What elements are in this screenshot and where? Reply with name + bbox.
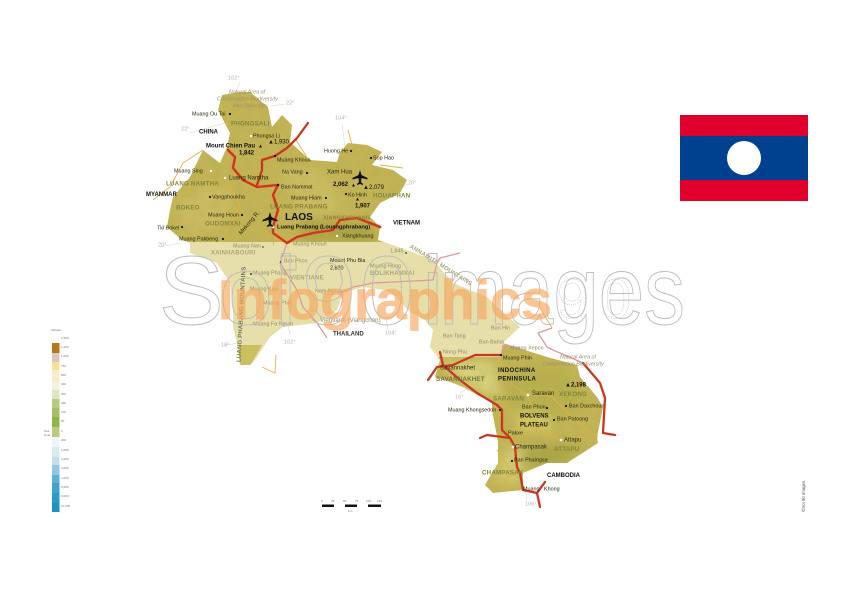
central faded labels: Nam Ngum bbox=[315, 288, 343, 294]
north labels: Vangphoukha bbox=[212, 194, 245, 200]
legend: altitude scale: 3,000 bbox=[61, 466, 69, 470]
central faded labels: 104° bbox=[385, 330, 397, 336]
south labels: Muang Xepon bbox=[510, 345, 544, 351]
south labels: Champasak bbox=[515, 445, 548, 451]
south labels: Savannakhet bbox=[440, 366, 475, 372]
south labels: CHAMPASAK bbox=[482, 470, 524, 477]
north labels: Phongsa Li bbox=[253, 133, 280, 139]
north labels: 1,907 bbox=[355, 204, 371, 210]
north labels: Xam Hua bbox=[327, 170, 353, 176]
scale bar: 25 bbox=[331, 499, 335, 503]
south labels: Nong Phu bbox=[443, 349, 467, 355]
legend: altitude scale: Altitude bbox=[51, 328, 61, 332]
south labels: XEKONG bbox=[559, 391, 587, 398]
legend: altitude scale: 1,500 bbox=[61, 336, 69, 340]
north labels: ▲2,079 bbox=[363, 185, 385, 191]
scale bar bbox=[321, 499, 382, 513]
south labels: Ban Phon bbox=[522, 404, 546, 410]
central faded labels: 2,820 bbox=[330, 265, 344, 271]
central faded labels: Muang Phang bbox=[253, 270, 287, 276]
legend: altitude scale: 2,000 bbox=[61, 457, 69, 461]
legend: altitude scale: 600 bbox=[61, 373, 66, 377]
north labels: 2,062 bbox=[333, 182, 349, 188]
north labels: 104° bbox=[335, 115, 347, 121]
south labels: Ban Patoong bbox=[557, 416, 588, 422]
legend: altitude scale: 1,200 bbox=[61, 345, 69, 349]
central faded labels: LUANG PHABANG MOUNTAINS bbox=[237, 267, 248, 362]
north labels: 20° bbox=[408, 180, 416, 186]
north labels: 102° bbox=[228, 75, 240, 81]
north labels: Mekong R. bbox=[238, 210, 262, 236]
legend: altitude scale: 0 bbox=[61, 429, 63, 433]
north labels: Muang Hiam bbox=[291, 195, 322, 201]
legend: altitude scale: 6,000 bbox=[61, 494, 69, 498]
north labels: MYANMAR bbox=[146, 192, 177, 198]
central faded labels: THAILAND bbox=[333, 332, 364, 338]
north labels: Natural Area of bbox=[229, 89, 266, 95]
south labels: BOLVENS bbox=[520, 414, 549, 420]
south labels: INDOCHINA bbox=[498, 368, 536, 374]
north labels: LUANG NAMTHA bbox=[166, 181, 219, 188]
watermark: dotted numerals: 90 bbox=[557, 267, 631, 330]
central faded labels: Muang Kasi bbox=[250, 286, 278, 292]
map: Laos terrain bbox=[167, 92, 603, 493]
north labels: Muang Khoua bbox=[277, 157, 311, 163]
south labels: Muang Khongsedon bbox=[448, 407, 496, 413]
south labels: Muang bbox=[523, 486, 539, 492]
terrain: faded central band bbox=[188, 242, 520, 365]
central faded labels: Vientiane (Viangchan) bbox=[320, 317, 381, 324]
central faded labels: ANNAMITE MOUNTAINS bbox=[408, 244, 473, 288]
watermark: orange word: Infographics bbox=[218, 268, 552, 331]
legend: altitude scale: 750 bbox=[61, 364, 66, 368]
north labels: Muang Sing bbox=[174, 168, 203, 174]
central faded labels: XAINHABOURI bbox=[211, 251, 256, 257]
north labels: PHONGSALI bbox=[231, 121, 270, 128]
legend: altitude scale: Sea bbox=[44, 429, 50, 433]
south labels: Pakxe bbox=[508, 430, 523, 436]
north labels: Muang Pakbeng bbox=[179, 236, 218, 242]
legend: altitude scale bbox=[44, 328, 71, 512]
legend: altitude scale: 200 bbox=[61, 401, 66, 405]
south labels: Khong bbox=[544, 486, 560, 492]
north labels: Sop Hao bbox=[373, 155, 394, 161]
north labels: LUANG PRABANG bbox=[270, 204, 328, 211]
central faded labels: 102° bbox=[284, 339, 296, 345]
legend: altitude scale: 400 bbox=[61, 382, 66, 386]
north labels bbox=[146, 75, 420, 248]
south labels: Ban Hin bbox=[491, 325, 510, 331]
north labels: Phu Dene Din bbox=[233, 103, 267, 109]
north labels: ▲ bbox=[258, 143, 263, 149]
central faded labels: Muang Khoun bbox=[293, 241, 327, 247]
south labels: Ban Daxchoun bbox=[569, 403, 604, 409]
south labels: 106° bbox=[525, 501, 537, 507]
north labels: Mount Chien Pau bbox=[206, 144, 255, 150]
south labels: SAVANNAKHET bbox=[436, 376, 485, 383]
north labels: ▲1,930 bbox=[268, 140, 290, 146]
legend: altitude scale: 4,000 bbox=[61, 476, 69, 480]
north labels: Muang Houn bbox=[208, 212, 239, 218]
scale bar: 50 bbox=[343, 499, 347, 503]
north labels: Muang Ou Tai bbox=[192, 111, 225, 117]
south labels: Ban Phaingsa bbox=[514, 457, 548, 463]
minor rivers and roads bbox=[153, 130, 598, 490]
scale bar: 75 bbox=[355, 499, 359, 503]
legend: altitude scale: 300 bbox=[61, 392, 66, 396]
south labels bbox=[436, 325, 604, 507]
north labels: Luang Namtha bbox=[229, 176, 269, 182]
south labels: Muang Phin bbox=[503, 355, 532, 361]
north labels: Na Vang bbox=[282, 169, 303, 175]
main roads bbox=[228, 123, 615, 507]
scale bar: 125 bbox=[377, 499, 382, 503]
central faded labels: Muang Phin bbox=[263, 300, 292, 306]
legend: altitude scale: level bbox=[44, 433, 51, 437]
legend: altitude scale: 50 bbox=[61, 419, 65, 423]
legend: altitude scale: 1,000 bbox=[61, 448, 69, 452]
scale bar: 0 bbox=[321, 499, 323, 503]
north labels: LAOS bbox=[285, 212, 313, 223]
south labels: Natural Area of bbox=[560, 354, 597, 360]
north labels: BOKEO bbox=[176, 205, 200, 212]
legend: altitude scale: 5,000 bbox=[61, 485, 69, 489]
north labels: 1,842 bbox=[239, 151, 255, 157]
north labels: Ko Hinh bbox=[348, 192, 367, 198]
central faded labels: Muang Fa Ngum bbox=[253, 321, 294, 327]
north labels: CHINA bbox=[199, 130, 219, 136]
watermark: outlined word: mages bbox=[440, 236, 685, 345]
south labels: PLATEAU bbox=[520, 423, 548, 429]
credit: ©Sol 90 Images bbox=[801, 480, 806, 512]
south labels: Saravan bbox=[532, 391, 554, 397]
south labels: ▲2,198 bbox=[565, 383, 587, 389]
north labels: Conservation Biodiversity bbox=[217, 96, 278, 102]
north labels: VIETNAM bbox=[393, 221, 420, 227]
scale bar: Km bbox=[348, 509, 353, 513]
central faded labels: Mount Phu Bia bbox=[330, 258, 365, 264]
north labels: Xiangkhuang bbox=[342, 233, 373, 239]
central faded labels: Muang Hung bbox=[370, 263, 401, 269]
central faded labels: Muang Nan bbox=[233, 243, 261, 249]
north labels: Tkl Bokel bbox=[157, 225, 179, 231]
south labels: Ban Bahia bbox=[479, 339, 504, 345]
north labels: Luang Prabang (Louangphrabang) bbox=[277, 224, 370, 230]
north labels: OUDOMXAI bbox=[205, 221, 241, 228]
flag of Laos bbox=[680, 115, 808, 201]
north labels: XIANGKHOUANG bbox=[323, 215, 370, 221]
north labels: Huong He bbox=[324, 148, 348, 154]
south labels: CAMBODIA bbox=[547, 473, 581, 479]
graticule lines bbox=[160, 82, 527, 500]
legend: altitude scale: 100 bbox=[61, 410, 66, 414]
north labels: Ban Nammat bbox=[281, 184, 313, 190]
central faded labels: 18° bbox=[221, 342, 229, 348]
legend: altitude scale: 10,000 bbox=[61, 504, 71, 508]
south labels: Conservation Biodiversity bbox=[543, 361, 604, 367]
legend: altitude scale: 1,000 bbox=[61, 354, 69, 358]
south labels: Attapu bbox=[564, 438, 581, 444]
north labels: ▲ bbox=[355, 196, 360, 202]
watermark: outlined word bbox=[159, 236, 685, 345]
terrain: relief shading bbox=[175, 170, 590, 485]
central faded labels: VIENTIANE bbox=[290, 276, 324, 282]
south labels: PENINSULA bbox=[498, 377, 537, 383]
central faded labels bbox=[211, 241, 473, 362]
central faded labels: BOLIKHAMXAI bbox=[370, 271, 415, 277]
north labels: 22° bbox=[181, 126, 189, 132]
south labels: ATTAPU bbox=[554, 446, 580, 453]
pink faded roads and borders bbox=[280, 243, 583, 363]
icon: airports bbox=[262, 170, 368, 227]
watermark: outlined word: Sol90i bbox=[159, 236, 444, 345]
south labels: Ban Tang bbox=[443, 333, 466, 339]
north labels: 20° bbox=[158, 242, 166, 248]
central faded labels: Ban Phon bbox=[284, 258, 308, 264]
south labels: SARAVAN bbox=[493, 396, 524, 403]
legend: altitude scale: 200 bbox=[61, 438, 66, 442]
central faded labels: 1,845 bbox=[390, 248, 404, 254]
north labels: HOUAPHAN bbox=[373, 193, 411, 200]
north labels: ▲ bbox=[351, 182, 356, 188]
south labels: 16° bbox=[455, 394, 463, 400]
north labels: 22° bbox=[286, 100, 294, 106]
scale bar: 100 bbox=[366, 499, 371, 503]
